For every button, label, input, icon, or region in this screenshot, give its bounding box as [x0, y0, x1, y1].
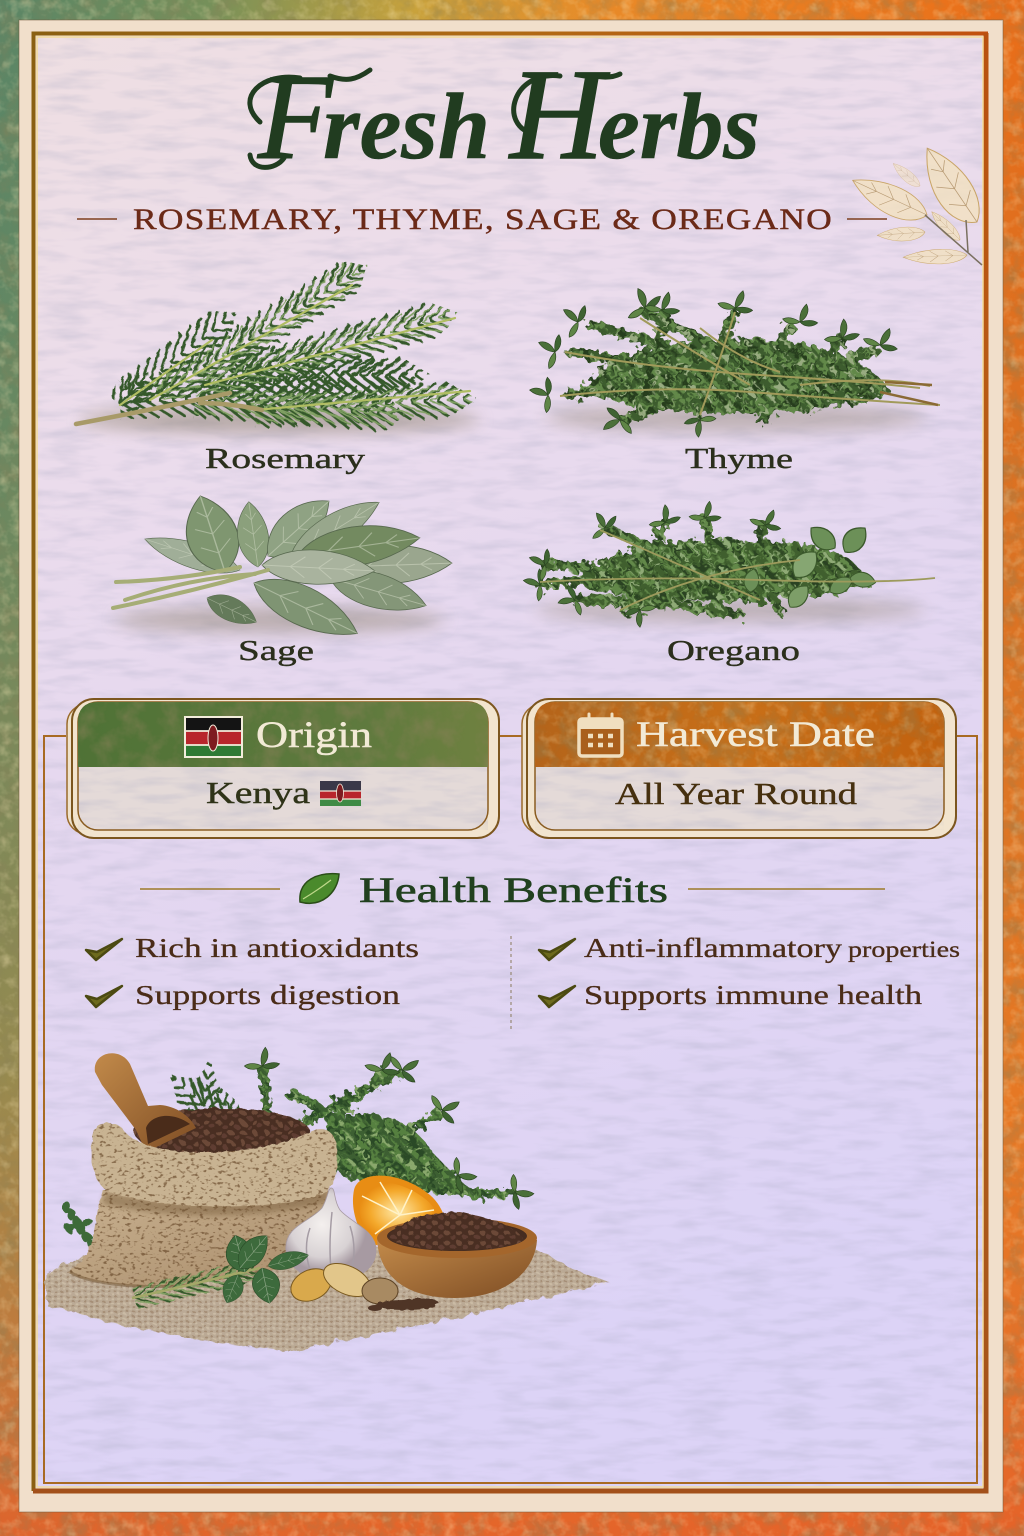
decorative pale leaves [846, 139, 991, 265]
benefit: anti-inflammatory [539, 933, 960, 963]
benefit: antioxidants: Rich in antioxidants [135, 933, 419, 963]
garlic cloves [286, 1257, 398, 1307]
burlap cloth [46, 1245, 610, 1352]
label: thyme: Thyme [685, 443, 793, 475]
label: sage: Sage [238, 635, 314, 667]
illustration: burlap sack with spices and herbs [46, 1044, 610, 1352]
panel: origin [67, 699, 499, 838]
icon: calendar [579, 714, 622, 756]
title: erbs [598, 75, 760, 179]
benefit: anti-inflammatory: properties [848, 937, 960, 962]
herb: sage [113, 486, 453, 650]
title: resh [323, 75, 490, 179]
heading: health benefits [140, 870, 885, 910]
small herb left [65, 1205, 92, 1245]
sack body [68, 1190, 330, 1287]
title: H [508, 43, 610, 187]
benefit: digestion: Supports digestion [135, 980, 401, 1010]
benefit: anti-inflammatory: Anti-inflammatory [584, 933, 843, 963]
herb: oregano [522, 500, 935, 630]
harvest value: All Year Round [615, 776, 858, 811]
herb: thyme [528, 281, 940, 446]
wooden scoop [95, 1053, 196, 1152]
title [250, 43, 760, 187]
origin heading: Origin [256, 715, 372, 756]
harvest header band [535, 702, 944, 767]
inner frame line linking the cards [44, 736, 977, 1483]
icon: green leaf [300, 874, 339, 903]
subtitle: ROSEMARY, THYME, SAGE & OREGANO [133, 203, 833, 236]
icon: Kenya flag large [184, 716, 243, 758]
heading: health benefits: Health Benefits [359, 870, 668, 910]
foreground herbs [132, 1228, 311, 1309]
origin header band [78, 702, 488, 767]
origin value: Kenya [206, 775, 310, 810]
herbs behind sack [159, 1044, 535, 1210]
soil in sack [134, 1108, 310, 1156]
orange slice [353, 1176, 444, 1248]
title: F [257, 50, 334, 185]
benefits list [86, 933, 960, 1032]
wooden bowl [377, 1212, 537, 1298]
harvest heading: Harvest Date [636, 714, 875, 754]
benefit: immune health [539, 980, 923, 1010]
benefit: antioxidants [86, 933, 419, 963]
benefit: digestion [86, 980, 401, 1010]
garlic bulb [286, 1188, 376, 1280]
benefit: immune health: Supports immune health [584, 980, 923, 1010]
icon: Kenya flag small [320, 781, 361, 806]
sack rim [92, 1123, 337, 1206]
scattered spice [368, 1298, 438, 1311]
label: rosemary: Rosemary [205, 443, 366, 475]
panel: harvest date [522, 699, 956, 838]
label: oregano: Oregano [667, 635, 800, 667]
herb: rosemary [76, 248, 480, 435]
